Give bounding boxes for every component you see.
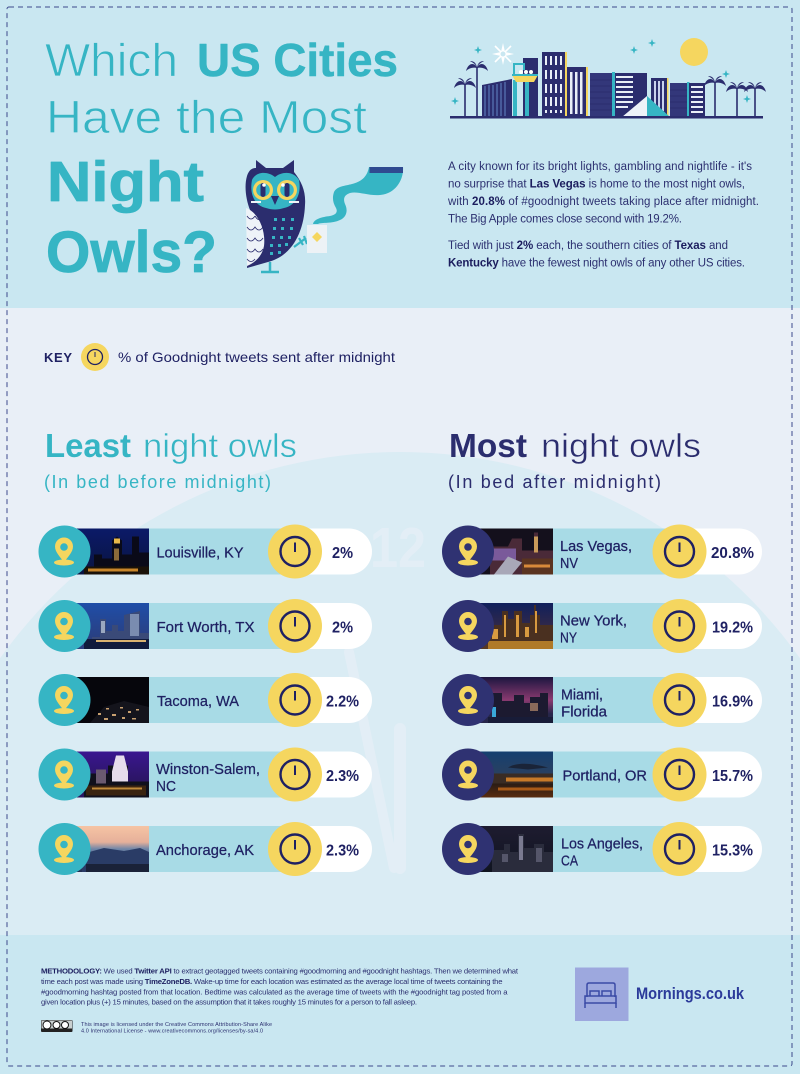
- icon: city skyline: [450, 38, 766, 118]
- row: Las Vegas, NV: [442, 524, 762, 578]
- row: Fort Worth, TX: [38, 599, 372, 653]
- row: Los Angeles, CA: Los Angeles,: [561, 836, 643, 852]
- text block: intro: no surprise that Las Vegas is home to the most night owls,: [448, 178, 745, 190]
- logo: Mornings.co.uk: [575, 968, 745, 1021]
- title: Night: [47, 150, 204, 214]
- row: Miami, Florida: 16.9%: [712, 694, 753, 710]
- title: US Cities: [197, 34, 398, 86]
- row: Anchorage, AK: [38, 822, 372, 876]
- row: Louisville, KY: 2%: [332, 545, 353, 562]
- row: New York, NY: New York,: [560, 612, 627, 630]
- text block: licence: 4.0 International License - www.creativecommons.org/licenses/by-sa/4.0: [81, 1028, 263, 1034]
- row: Winston-Salem, NC: Winston-Salem,: [156, 761, 260, 778]
- row: Louisville, KY: Louisville, KY: [156, 544, 244, 562]
- row: New York, NY: [442, 599, 762, 653]
- text block: methodology: given location plus (+) 15 minutes, based on the assumption that it takes roughly 15 minutes for a person to fall asleep.: [41, 998, 417, 1006]
- panel: footer: [0, 935, 800, 1074]
- key: % of Goodnight tweets sent after midnight: [118, 349, 395, 365]
- title: [45, 34, 398, 285]
- row: Portland, OR: [442, 748, 762, 802]
- row: Miami, Florida: Florida: [561, 704, 608, 720]
- row: Winston-Salem, NC: NC: [156, 778, 176, 795]
- heading: least night owls: [44, 427, 297, 492]
- title: Which: [45, 34, 178, 86]
- text block: licence: [81, 1022, 272, 1034]
- heading: least night owls: night owls: [143, 427, 297, 464]
- text block: intro: Tied with just 2% each, the southern cities of Texas and: [448, 240, 728, 252]
- key: KEY: [44, 350, 72, 365]
- row: Portland, OR: 15.7%: [712, 768, 753, 785]
- row: Las Vegas, NV: Las Vegas,: [560, 538, 632, 555]
- row: Los Angeles, CA: [442, 822, 762, 876]
- row: Miami, Florida: Miami,: [561, 686, 603, 704]
- row: Tacoma, WA: [38, 673, 372, 727]
- icon: creative commons badge: [41, 1020, 72, 1032]
- heading: most night owls: night owls: [541, 427, 701, 464]
- row: Tacoma, WA: 2.2%: [326, 694, 359, 710]
- row: New York, NY: 19.2%: [712, 620, 753, 636]
- text block: intro: A city known for its bright lights, gambling and nightlife - it's: [448, 161, 752, 173]
- background: clock face: 12: [370, 516, 426, 580]
- heading: least night owls: Least: [45, 427, 131, 464]
- text block: methodology: #goodmorning hashtag posted from that location. Bedtime was calculated as the average time of tweets with the #goodnight tag posted from a: [41, 988, 508, 996]
- text block: intro: Kentucky have the fewest night owls of any other US cities.: [448, 258, 745, 270]
- background: clock face: [0, 452, 800, 935]
- heading: most night owls: Most: [449, 427, 527, 464]
- row: New York, NY: NY: [560, 630, 577, 646]
- row: Las Vegas, NV: 20.8%: [711, 545, 754, 562]
- row: Winston-Salem, NC: 2.3%: [326, 768, 359, 785]
- text block: methodology: METHODOLOGY: We used Twitter API to extract geotagged tweets containing #goodmorning and #goodnight hashtags. Then we determined what: [41, 966, 519, 976]
- row: Fort Worth, TX: Fort Worth, TX: [156, 619, 254, 636]
- text block: methodology: time each post was made using TimeZoneDB. Wake-up time for each location was estimated as the average local time of tweets containing the: [41, 977, 502, 986]
- text block: intro: with 20.8% of #goodnight tweets taking place after midnight.: [447, 196, 759, 208]
- icon: owl with cup and steam: [246, 160, 403, 272]
- row: Los Angeles, CA: 15.3%: [712, 842, 753, 860]
- text block: intro: [447, 161, 759, 270]
- row: Winston-Salem, NC: [38, 748, 372, 802]
- row: Miami, Florida: [442, 673, 762, 727]
- heading: most night owls: [448, 427, 701, 492]
- title: Owls?: [46, 220, 217, 285]
- row: Las Vegas, NV: NV: [560, 555, 578, 572]
- row: Los Angeles, CA: CA: [561, 852, 578, 870]
- text block: intro: The Big Apple comes close second with 19.2%.: [448, 214, 682, 226]
- title: Have the Most: [46, 91, 367, 143]
- text block: methodology: [41, 966, 519, 1006]
- row: Fort Worth, TX: 2%: [332, 620, 353, 636]
- logo: Mornings.co.uk: Mornings.co.uk: [636, 985, 745, 1003]
- text block: licence: This image is licensed under the Creative Commons Attribution-Share Alike: [81, 1022, 272, 1028]
- row: Portland, OR: Portland, OR: [562, 768, 647, 784]
- row: Louisville, KY: [38, 524, 372, 578]
- heading: least night owls: (In bed before midnight): [44, 472, 271, 492]
- row: Anchorage, AK: 2.3%: [326, 842, 359, 860]
- key: [44, 343, 395, 371]
- row: Tacoma, WA: Tacoma, WA: [157, 693, 239, 710]
- panel: header: [0, 0, 800, 308]
- row: Anchorage, AK: Anchorage, AK: [156, 842, 254, 859]
- heading: most night owls: (In bed after midnight): [448, 472, 661, 492]
